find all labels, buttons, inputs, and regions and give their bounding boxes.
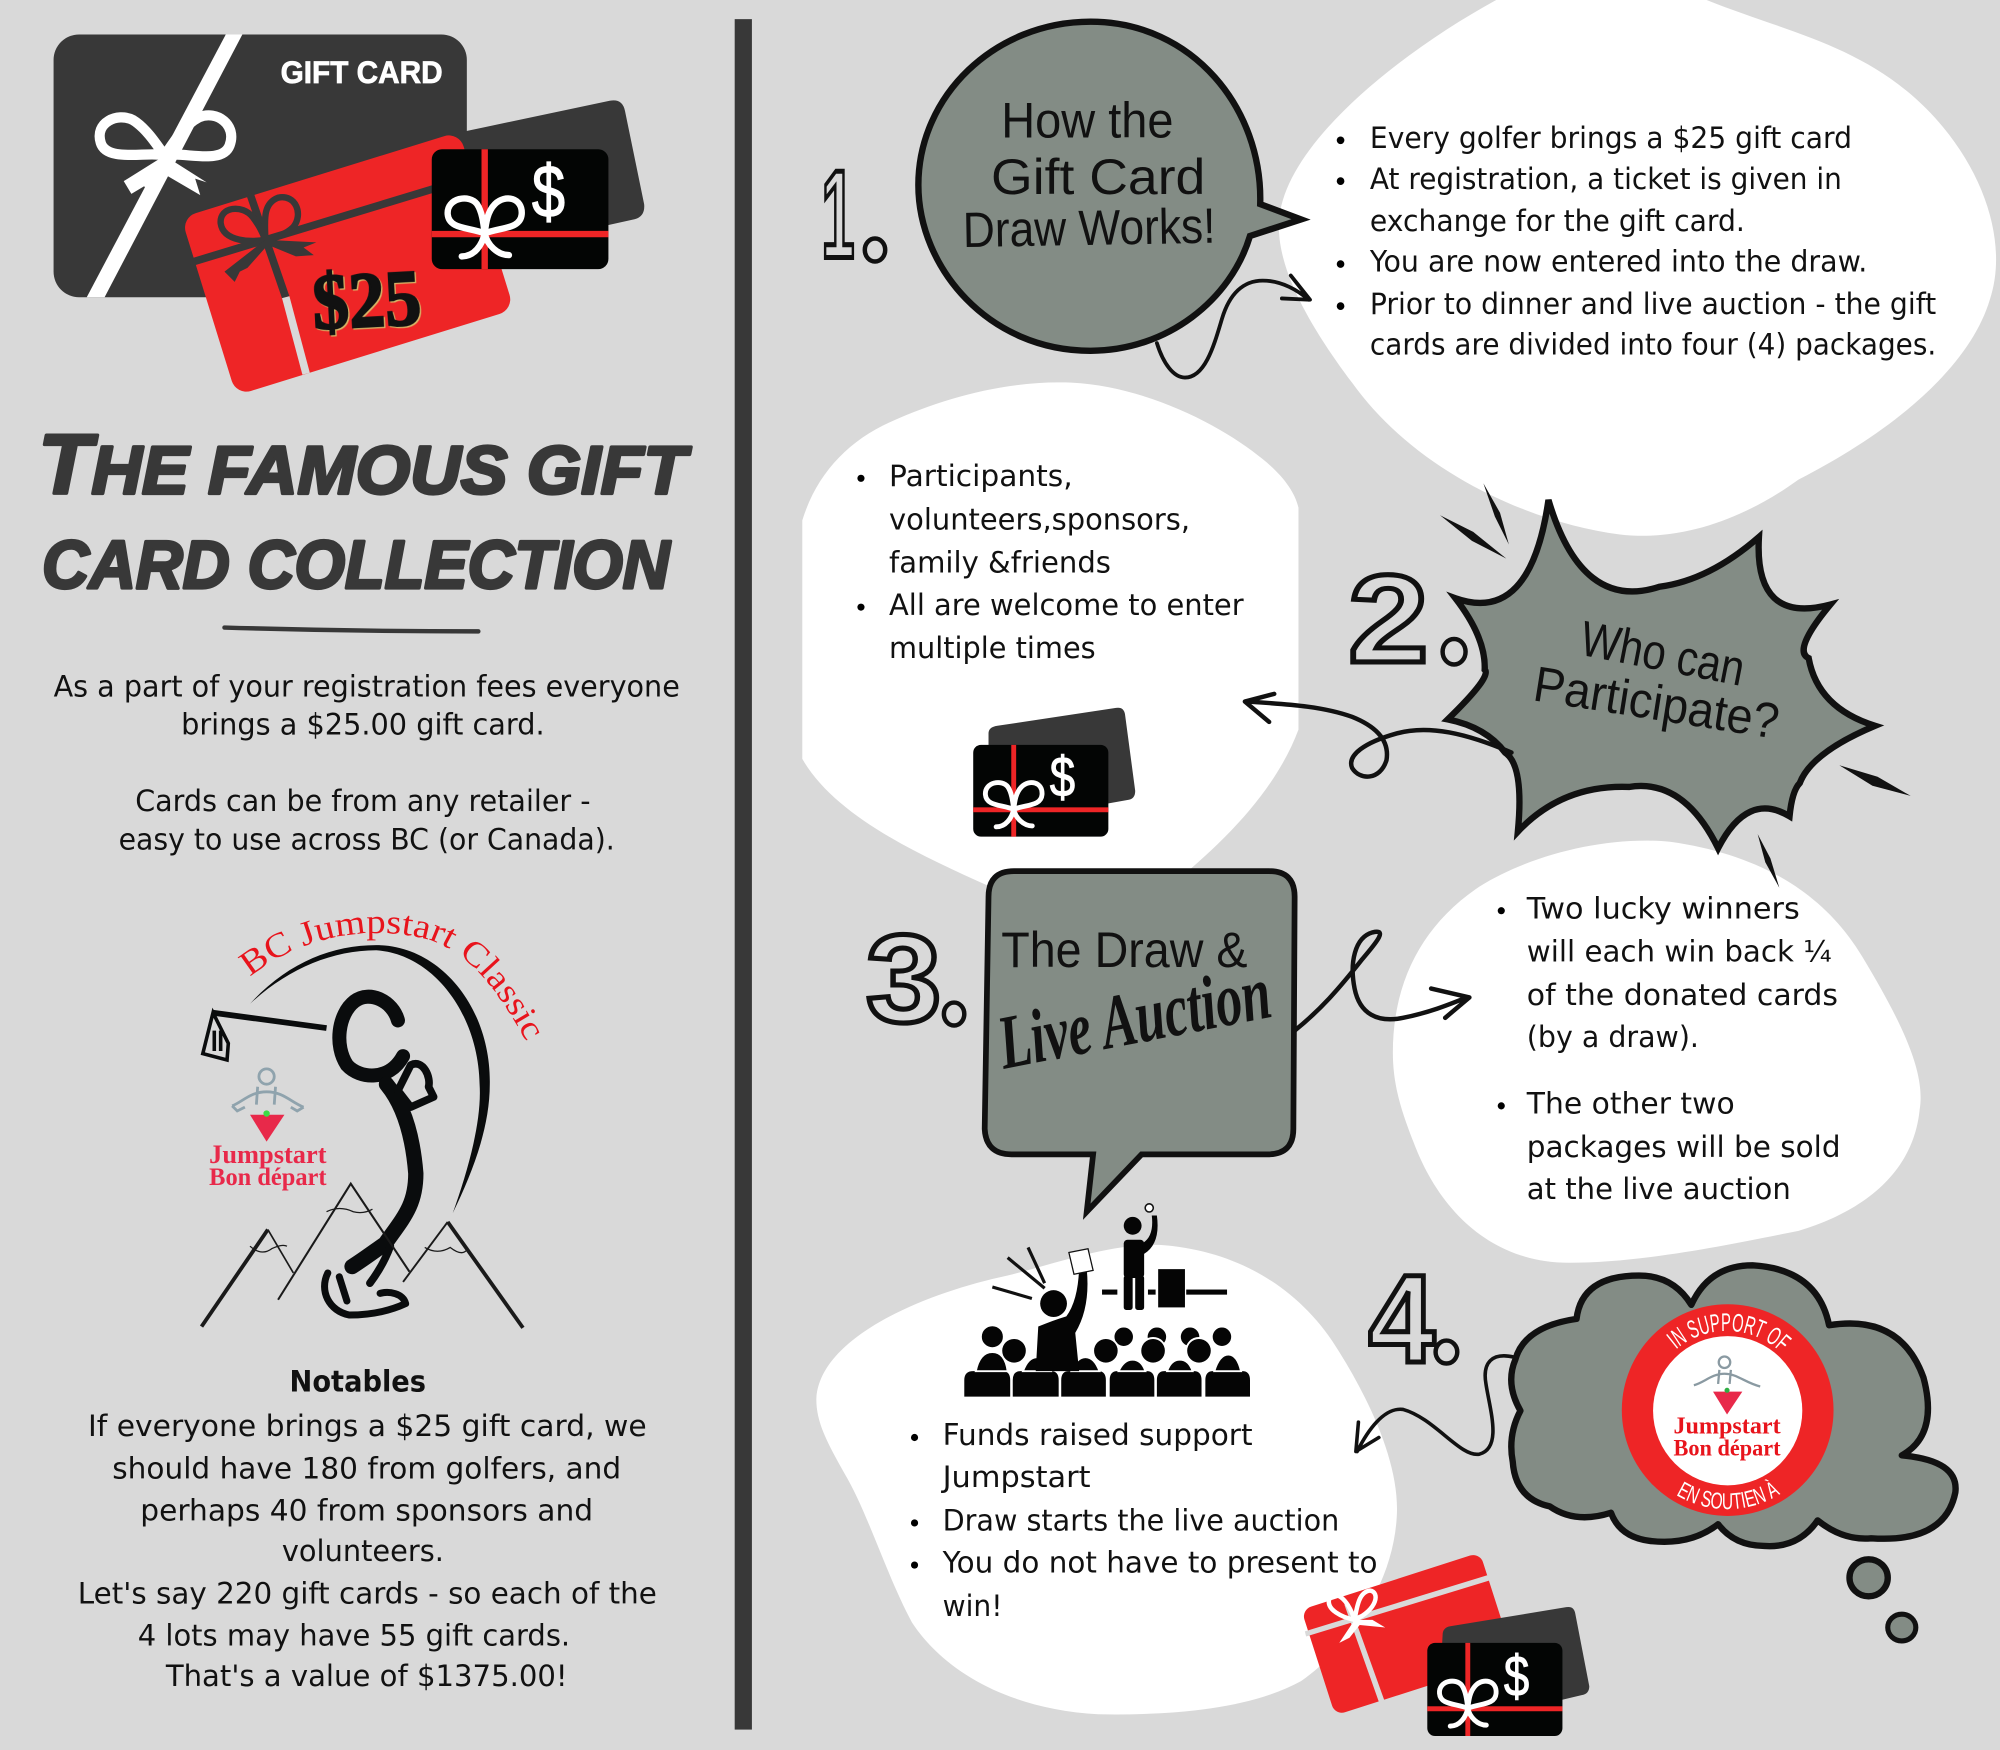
red card with white bow [1301, 1552, 1514, 1715]
logo: BC Jumpstart Classic golfer [200, 916, 540, 1329]
step 4 bullets [911, 1418, 1378, 1623]
notables text: should have 180 from golfers, and [112, 1451, 621, 1485]
large dark gift card [54, 34, 467, 297]
number 2 [1348, 550, 1466, 689]
crowd seats [964, 1371, 1250, 1397]
speech box: the draw and live auction [985, 871, 1295, 1212]
thought dots [1849, 1559, 1916, 1641]
arrow: step 3 [1295, 932, 1469, 1031]
step 3 bullets: (by a draw). [1527, 1020, 1699, 1054]
icon: live auction crowd [964, 1204, 1250, 1397]
title: THE FAMOUS GIFT [38, 418, 692, 512]
black card [1427, 1643, 1562, 1736]
step 1 bullets [1337, 121, 1936, 362]
dark back card [1441, 1607, 1589, 1703]
speech box: the draw and live auction: The Draw & [1001, 922, 1247, 978]
step 4 bullets: Draw starts the live auction [943, 1504, 1339, 1538]
burst bubble: who can participate [1440, 483, 1911, 888]
step 3 bullets: The other two [1526, 1087, 1735, 1121]
mini gift cards: $ [1050, 746, 1075, 809]
panel: step 1 white blob [1279, 0, 1996, 536]
badge: in support of: IN SUPPORT OF [1666, 1313, 1792, 1349]
step 4 bullets: Jumpstart [941, 1460, 1091, 1494]
intro text: Cards can be from any retailer - [135, 784, 591, 818]
step 4 bullets: win! [943, 1589, 1003, 1623]
panel: step 3 white blob [1393, 841, 1921, 1263]
notables text: Notables [290, 1365, 426, 1399]
auctioneer [1124, 1204, 1158, 1310]
intro text: As a part of your registration fees everyone [54, 669, 680, 703]
step 3 bullets: packages will be sold [1527, 1130, 1841, 1164]
step 3 bullets: of the donated cards [1527, 978, 1838, 1012]
gift cards illustration [54, 34, 644, 395]
mini gift cards [973, 708, 1135, 837]
step 1 bullets: Every golfer brings a $25 gift card [1370, 121, 1852, 155]
burst accent strokes [1440, 483, 1911, 888]
number 2: 2 [1348, 550, 1429, 689]
step 2 bullets: Participants, [889, 459, 1073, 493]
burst bubble: who can participate: Participate? [1530, 656, 1783, 750]
Jumpstart mini logo: Jumpstart [209, 1139, 327, 1169]
thought cloud with badge [1508, 1262, 1959, 1644]
speech bubble: how the draw works: How the [1001, 93, 1173, 149]
step 1 bullets: Prior to dinner and live auction - the gift [1370, 287, 1936, 321]
speech bubble: how the draw works: Draw Works! [962, 198, 1216, 258]
step 4 bullets: Funds raised support [943, 1418, 1253, 1452]
step 3 bullets [1498, 891, 1841, 1206]
notables text: perhaps 40 from sponsors and [140, 1493, 593, 1527]
step 1 bullets: exchange for the gift card. [1370, 204, 1745, 238]
badge: in support of: EN SOUTIEN À [1677, 1479, 1780, 1510]
step 3 bullets: will each win back ¼ [1527, 935, 1832, 969]
step 4 bullets: You do not have to present to [942, 1546, 1378, 1580]
step 2 bullets: multiple times [889, 631, 1096, 665]
speech bubble: how the draw works: Gift Card [991, 149, 1205, 205]
notables text: Let's say 220 gift cards - so each of the [78, 1576, 657, 1610]
crowd heads [976, 1325, 1241, 1371]
burst bubble: who can participate: Who can [1576, 610, 1749, 697]
step 2 bullets [857, 459, 1245, 665]
badge: in support of [1622, 1304, 1834, 1516]
speech bubble: how the draw works [918, 22, 1301, 351]
center divider [735, 19, 752, 1730]
step 3 bullets: Two lucky winners [1526, 891, 1800, 925]
logo arc text: BC Jumpstart Classic [238, 916, 540, 1040]
step 3 bullets: at the live auction [1527, 1172, 1791, 1206]
intro text [54, 669, 680, 856]
mountains [202, 1184, 523, 1328]
notables text: If everyone brings a $25 gift card, we [88, 1409, 647, 1443]
panel: step 2 white blob [802, 382, 1298, 886]
red gift card [181, 132, 514, 395]
$25 amount: $25 [310, 255, 423, 347]
step 2 bullets: volunteers,sponsors, [889, 502, 1190, 536]
step 2 bullets: family &friends [889, 546, 1111, 580]
Jumpstart mini logo [209, 1069, 327, 1191]
arrow: step 1 [1157, 276, 1310, 378]
small black gift card: $ [532, 150, 565, 233]
swing arc [250, 945, 490, 1213]
notables text: That's a value of $1375.00! [165, 1659, 568, 1693]
bidder with raised hand [992, 1247, 1093, 1371]
bottom gift cards [1301, 1552, 1589, 1736]
golfer figure [325, 997, 434, 1315]
step 1 bullets: You are now entered into the draw. [1369, 245, 1867, 279]
notables text: volunteers. [282, 1534, 444, 1568]
black card: $ [1504, 1644, 1529, 1708]
podium [1102, 1269, 1227, 1307]
number 3: 3 [866, 910, 941, 1049]
title [38, 418, 692, 603]
notables text [78, 1365, 657, 1693]
badge: in support of: Bon départ [1673, 1435, 1781, 1460]
panel: step 4 white blob [816, 1245, 1397, 1714]
title: CARD COLLECTION [42, 528, 671, 603]
step 1 bullets: At registration, a ticket is given in [1370, 162, 1842, 196]
speech box: the draw and live auction: Live Auction [990, 950, 1278, 1086]
badge: in support of: Jumpstart [1673, 1413, 1781, 1440]
arrow: step 4 [1356, 1356, 1514, 1454]
number 1: 1 [821, 146, 855, 285]
intro text: easy to use across BC (or Canada). [119, 822, 615, 856]
title underline [224, 628, 478, 631]
intro text: brings a $25.00 gift card. [181, 708, 545, 742]
number 4: 4 [1369, 1250, 1435, 1389]
golf club [203, 1013, 327, 1060]
arrow: step 2 [1245, 694, 1511, 777]
Jumpstart mini logo: Bon départ [209, 1162, 327, 1191]
dark back card [453, 100, 644, 230]
large dark gift card: GIFT CARD [281, 54, 443, 90]
step 1 bullets: cards are divided into four (4) packages. [1370, 328, 1936, 362]
notables text: 4 lots may have 55 gift cards. [138, 1618, 570, 1652]
step 2 bullets: All are welcome to enter [889, 588, 1245, 622]
small black gift card [432, 149, 608, 269]
